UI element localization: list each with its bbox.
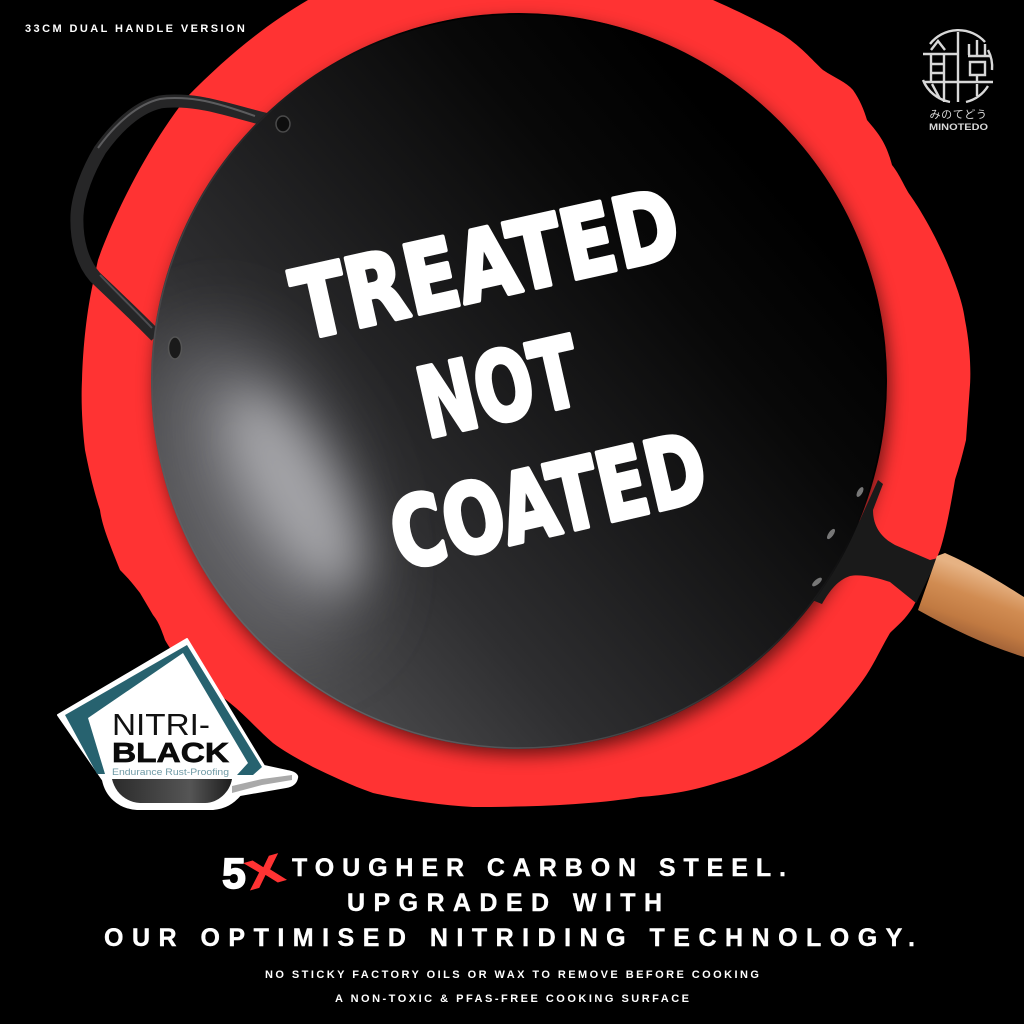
wok bowl	[114, 0, 900, 760]
brand logo: MINOTEDO	[929, 122, 988, 133]
badge wording: BLACK	[112, 737, 229, 768]
tagline: TOUGHER CARBON STEEL.	[292, 854, 786, 882]
badge wording: NITRI-	[112, 707, 210, 742]
badge wording	[112, 707, 229, 778]
brand logo	[923, 30, 993, 133]
wooden handle	[918, 553, 1024, 657]
headline: treated not coated: COATED	[380, 411, 717, 592]
5x mark	[222, 846, 290, 899]
badge white outline	[58, 639, 297, 809]
rivets	[168, 116, 865, 588]
headline: treated not coated	[283, 168, 717, 592]
nitri-black badge	[58, 639, 297, 809]
mini pan	[112, 779, 232, 803]
left loop handle	[77, 98, 268, 336]
headline: treated not coated: TREATED	[283, 168, 690, 362]
right handle bracket	[812, 480, 938, 604]
tagline: NO STICKY FACTORY OILS OR WAX TO REMOVE BEFORE COOKING	[265, 969, 759, 981]
tagline: UPGRADED WITH	[347, 889, 662, 917]
5x mark: X	[240, 846, 290, 899]
tagline: OUR OPTIMISED NITRIDING TECHNOLOGY.	[104, 924, 915, 952]
tagline: A NON-TOXIC & PFAS-FREE COOKING SURFACE	[335, 993, 689, 1005]
brand logo: みのてどう	[930, 108, 988, 121]
red paint blob	[82, 0, 970, 807]
logo mark	[923, 30, 993, 102]
5x mark: 5	[222, 850, 246, 898]
headline: treated not coated: NOT	[407, 316, 590, 460]
top label: 33CM DUAL HANDLE VERSION	[25, 23, 247, 35]
badge wording: Endurance Rust-Proofing	[112, 767, 229, 778]
wok shadow on red	[155, 21, 889, 755]
tagline	[104, 846, 915, 1005]
wok with handles and text	[77, 0, 1024, 760]
teal frame	[65, 645, 262, 775]
